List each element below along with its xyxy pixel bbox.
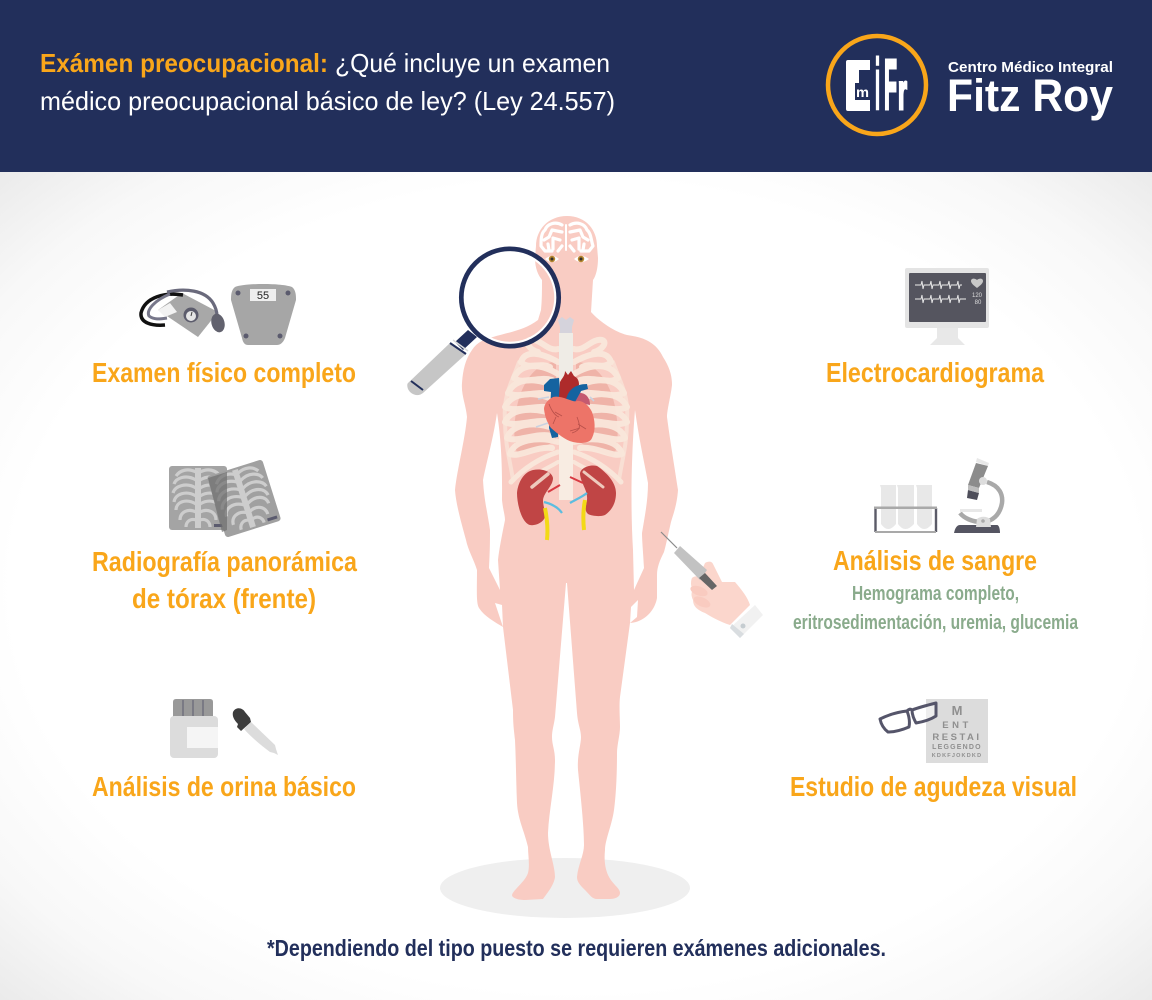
heading: Examen físico completo	[92, 357, 356, 388]
brain	[541, 223, 593, 251]
icon: eye chart: M	[952, 703, 962, 718]
detail text	[793, 583, 1079, 634]
title: ¿Qué incluye un examen	[335, 48, 610, 78]
panel: examen fisico	[92, 284, 356, 388]
icon: ECG monitor: 80	[975, 300, 982, 306]
icon: eye chart: ENT	[942, 720, 972, 731]
icon: weighing scale: 55	[257, 290, 269, 302]
heading: Análisis de orina básico	[92, 771, 356, 802]
logo: r	[898, 64, 907, 120]
title: Exámen preocupacional:	[40, 48, 328, 78]
icon: weighing scale	[231, 284, 296, 345]
logo: m	[856, 84, 869, 100]
eyes	[545, 256, 589, 262]
icon: eye chart	[926, 699, 988, 763]
lungs	[514, 362, 618, 457]
icon: blood pressure cuff	[141, 290, 227, 337]
panel: analisis de sangre	[793, 458, 1079, 634]
icon: eye chart: RESTAI	[932, 732, 982, 743]
body silhouette	[455, 216, 678, 900]
footnote: *Dependiendo del tipo puesto se requieren exámenes adicionales.	[267, 935, 886, 961]
ribcage	[505, 340, 627, 488]
logo: Fitz Roy	[947, 70, 1113, 121]
icon: test tubes	[874, 485, 937, 533]
icon: ECG monitor	[905, 268, 989, 345]
logo	[828, 36, 1113, 134]
icon: ECG monitor: 120	[972, 293, 983, 299]
logo: F	[884, 46, 897, 125]
icon: specimen jar	[170, 699, 218, 758]
icon: eye chart: LEGGENDO	[932, 744, 982, 751]
header band	[0, 0, 1152, 172]
heading: Radiografía panorámica	[92, 546, 357, 577]
heading: Electrocardiograma	[826, 357, 1044, 388]
title: médico preocupacional básico de ley? (Ley 24.557)	[40, 86, 615, 116]
panel: agudeza visual	[790, 699, 1077, 802]
heading	[92, 546, 357, 614]
icon: chest x-rays	[169, 459, 281, 538]
panel: electrocardiograma	[826, 268, 1044, 388]
floor shadow	[440, 858, 690, 918]
heading: Análisis de sangre	[833, 545, 1037, 576]
icon: glasses	[880, 703, 936, 732]
detail text: eritrosedimentación, uremia, glucemia	[793, 612, 1079, 634]
icon: microscope	[954, 458, 1002, 533]
human body figure	[455, 216, 678, 900]
detail text: Hemograma completo,	[852, 583, 1019, 605]
logo: Centro Médico Integral	[948, 59, 1113, 76]
spine and sternum	[558, 317, 574, 500]
heading: de tórax (frente)	[132, 583, 316, 614]
icon: eye chart: KDKFJOKDKD	[932, 753, 982, 759]
heart	[536, 371, 595, 443]
icon: dropper	[233, 708, 278, 755]
panel: radiografia	[92, 459, 357, 614]
kidneys	[517, 465, 616, 540]
icon: syringe and gloved hand	[661, 532, 763, 638]
heading: Estudio de agudeza visual	[790, 771, 1077, 802]
title	[40, 48, 615, 116]
panel: analisis de orina	[92, 699, 356, 802]
icon: magnifying glass	[407, 249, 559, 395]
logo: i	[875, 46, 880, 125]
